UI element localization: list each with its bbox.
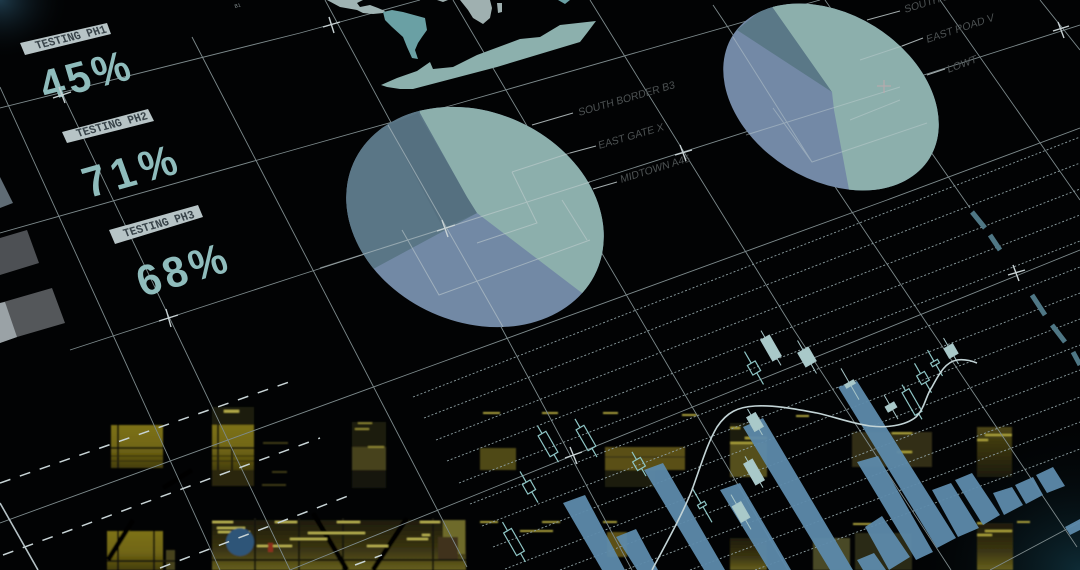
map: asia fragment <box>558 0 570 4</box>
tag ph1: TESTING PH1 <box>34 25 109 53</box>
map: madagascar <box>497 3 502 13</box>
pie 2 labels <box>867 0 1002 76</box>
value 71%: 71% <box>76 134 189 207</box>
candlesticks outlined <box>499 348 946 564</box>
background: lit office building windows <box>107 407 1030 570</box>
pie 1 slice: slate <box>346 110 476 268</box>
pie 1 labels <box>532 79 691 189</box>
blue bar chart <box>563 381 1080 570</box>
stat: testing ph1 45% <box>20 23 140 110</box>
pie 2 slice: blue <box>723 4 939 190</box>
bar 3 <box>0 288 65 343</box>
stat: testing ph2 71% <box>62 109 189 207</box>
pie chart 1 <box>320 106 604 328</box>
pie 1 slice: dark band <box>388 113 477 228</box>
candlesticks filled <box>727 328 963 532</box>
crosshair markers <box>53 17 1069 464</box>
pie 2 slice: dark <box>737 0 832 92</box>
dashed guide lines <box>0 381 382 568</box>
small top label: B1 <box>234 2 242 10</box>
dotted grid lines <box>413 137 1080 570</box>
label: low t: LOWT <box>947 53 978 76</box>
value 68%: 68% <box>130 233 238 307</box>
pie 2 overlay lines <box>733 37 927 162</box>
bar 1 <box>0 177 13 208</box>
label: east road v: EAST ROAD V <box>926 11 996 46</box>
map: africa <box>460 0 492 24</box>
thick white axis bottom left <box>0 503 38 570</box>
tag ph2: TESTING PH2 <box>75 110 150 141</box>
label: south border b3: SOUTH BORDER B3 <box>578 79 676 119</box>
label: east gate x: EAST GATE X <box>598 121 665 152</box>
bar 2 <box>0 230 39 275</box>
world map <box>327 0 596 89</box>
map: north america <box>327 0 385 14</box>
stat: testing ph3 68% <box>109 205 238 307</box>
pie 2 slice: teal <box>772 4 939 190</box>
map: antarctica <box>381 21 596 89</box>
thick dashed right axis <box>972 212 1080 365</box>
pie 1 slice: teal <box>420 106 604 293</box>
pie 1 overlay lines <box>320 125 590 327</box>
tag ph3: TESTING PH3 <box>122 209 197 241</box>
map: europe fragment <box>437 0 448 2</box>
trend curve <box>652 360 977 570</box>
map: south america <box>383 10 427 59</box>
label: midtown a45: MIDTOWN A45 <box>620 152 691 186</box>
value 45%: 45% <box>33 41 140 110</box>
pie 1 slice: blue <box>346 106 604 328</box>
pie chart 2 <box>723 4 939 190</box>
left bar chart <box>0 177 65 343</box>
